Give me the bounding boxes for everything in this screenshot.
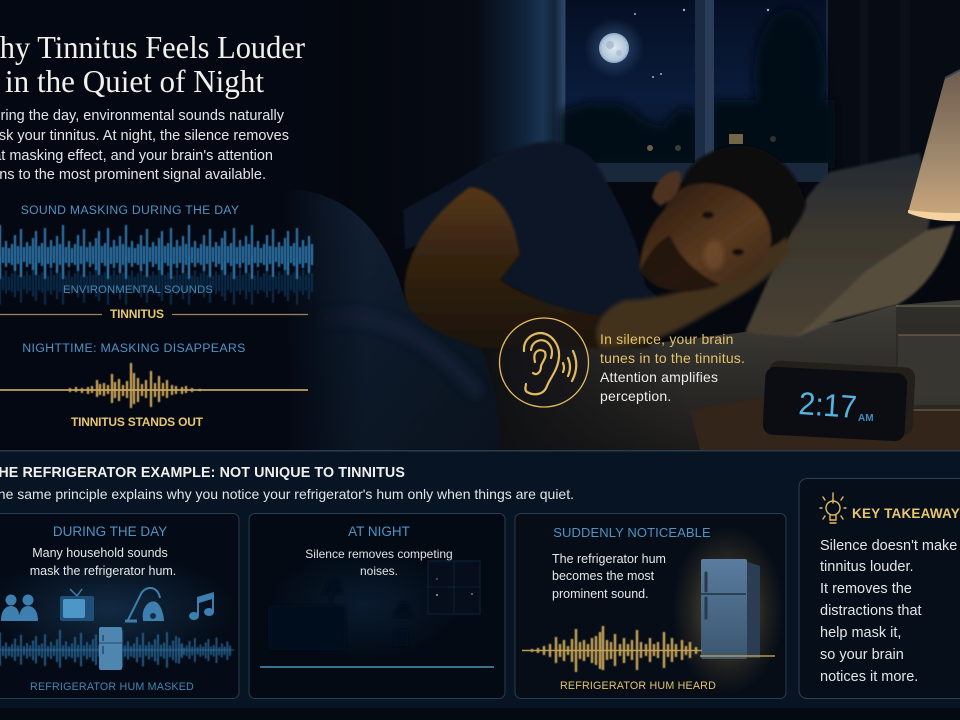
alarm clock xyxy=(762,360,916,442)
takeaway text: It removes the xyxy=(820,581,912,597)
card label: REFRIGERATOR HUM MASKED xyxy=(30,681,194,693)
window mullion xyxy=(695,0,705,163)
card text: Silence removes competing xyxy=(305,547,453,561)
window sill xyxy=(594,163,828,173)
callout text xyxy=(600,331,745,404)
card heading: DURING THE DAY xyxy=(53,524,167,539)
arm under head xyxy=(596,232,790,348)
card heading: SUDDENLY NOTICEABLE xyxy=(553,525,711,540)
upper bright wave xyxy=(0,225,312,279)
takeaway text: tinnitus louder. xyxy=(820,559,914,575)
tinnitus divider: TINNITUS xyxy=(110,307,164,321)
nightstand xyxy=(690,398,960,450)
takeaway text: distractions that xyxy=(820,603,922,619)
stars xyxy=(634,9,769,78)
hair xyxy=(680,146,806,248)
waveform: hum heard xyxy=(522,626,775,672)
arm xyxy=(404,187,650,348)
card text: mask the refrigerator hum. xyxy=(30,564,176,578)
card text xyxy=(305,547,453,578)
beard shadow xyxy=(640,235,720,291)
callout text: tunes in to the tinnitus. xyxy=(600,350,745,366)
distant lights xyxy=(647,134,776,151)
clock time: 2:17 xyxy=(798,385,858,425)
moon xyxy=(588,21,641,74)
pillows xyxy=(745,153,955,337)
callout ear icon xyxy=(500,318,588,407)
callout text: In silence, your brain xyxy=(600,331,734,347)
window with night sky xyxy=(560,0,835,182)
left dark fade xyxy=(270,188,346,450)
panel: refrigerator section xyxy=(0,450,960,720)
title: in the Quiet of Night xyxy=(5,63,264,99)
takeaway heading: KEY TAKEAWAY xyxy=(852,506,960,521)
callout text: Attention amplifies xyxy=(600,369,718,385)
flat line xyxy=(260,666,494,668)
label: tinnitus stands out: TINNITUS STANDS OUT xyxy=(71,415,204,429)
card text: prominent sound. xyxy=(552,587,649,601)
dim room silhouette xyxy=(268,578,412,650)
lamp shade xyxy=(908,70,960,221)
card text: Many household sounds xyxy=(32,546,168,560)
card label: REFRIGERATOR HUM HEARD xyxy=(560,680,716,692)
label: environmental sounds: ENVIRONMENTAL SOUNDS xyxy=(63,284,213,296)
card text: becomes the most xyxy=(552,569,655,583)
t-shirt torso xyxy=(403,142,660,322)
intro text xyxy=(0,108,289,183)
icon: television xyxy=(60,589,94,621)
heading: day masking: SOUND MASKING DURING THE DAY xyxy=(21,203,239,217)
card text: noises. xyxy=(360,564,398,578)
card: suddenly noticeable xyxy=(515,514,786,698)
icon: light bulb xyxy=(820,493,846,523)
dim window xyxy=(428,561,480,614)
takeaway text: Silence doesn't make xyxy=(820,538,957,554)
card text xyxy=(552,552,666,601)
takeaway text: so your brain xyxy=(820,647,904,663)
callout text: perception. xyxy=(600,388,671,404)
takeaway text xyxy=(820,538,957,685)
title xyxy=(0,29,305,99)
face xyxy=(640,181,790,291)
eyes xyxy=(702,212,714,218)
takeaway text: help mask it, xyxy=(820,625,901,641)
section subheading: The same principle explains why you notice your refrigerator's hum only when things are quiet. xyxy=(0,486,574,502)
icon: refrigerator xyxy=(99,627,122,670)
heading: nighttime: NIGHTTIME: MASKING DISAPPEARS xyxy=(22,341,246,355)
icon: music note xyxy=(189,592,214,620)
waveform: masked hum xyxy=(0,630,234,668)
card text xyxy=(30,546,176,578)
takeaway text: notices it more. xyxy=(820,669,918,685)
card: during the day xyxy=(0,514,239,698)
man's head xyxy=(640,146,806,291)
card: at night xyxy=(249,514,505,698)
lower dark wave xyxy=(0,256,312,305)
panel: key takeaway xyxy=(799,478,960,698)
clock AM: AM xyxy=(858,413,874,424)
room wall and curtains xyxy=(480,0,910,235)
water glass xyxy=(896,305,960,411)
section heading: THE REFRIGERATOR EXAMPLE: NOT UNIQUE TO TINNITUS xyxy=(0,465,405,481)
refrigerator xyxy=(701,559,760,659)
photo scene: man awake in bed at night xyxy=(296,0,960,450)
trees silhouette xyxy=(560,9,835,168)
icon: vacuum xyxy=(125,588,163,621)
icon: people xyxy=(1,594,38,621)
waveform: environmental sounds xyxy=(0,225,312,305)
card text: The refrigerator hum xyxy=(552,552,666,566)
ear xyxy=(652,171,681,206)
card heading: AT NIGHT xyxy=(348,524,410,539)
waveform: tinnitus alone xyxy=(0,363,308,408)
bed mattress xyxy=(480,300,960,450)
blanket xyxy=(300,190,500,450)
nose highlight xyxy=(704,240,724,270)
